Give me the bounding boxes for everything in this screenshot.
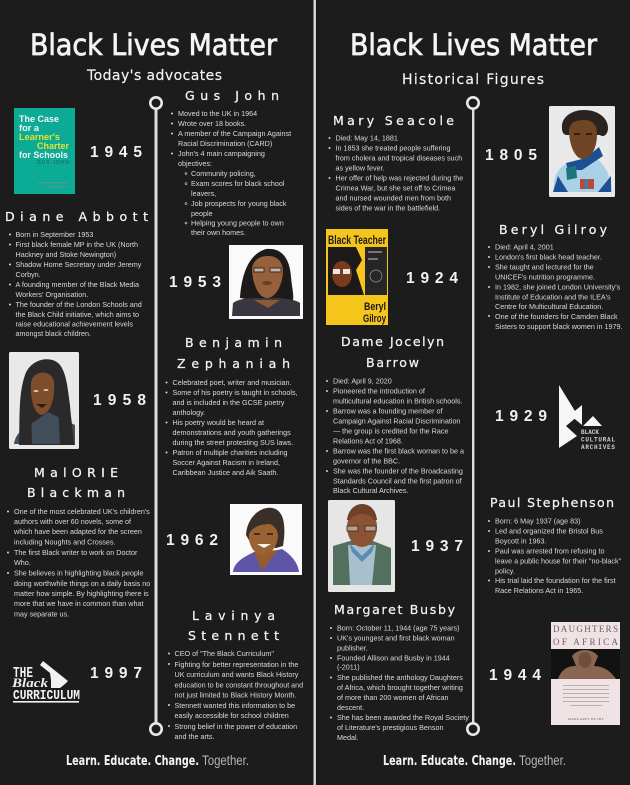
portrait: Paul Stephenson <box>328 500 395 592</box>
text block: Mary Seacole: sides of the war in the battlefield. <box>336 204 440 212</box>
text block: Gus John: objectives: <box>178 159 212 168</box>
text block: Margaret Busby: (-2011) <box>337 662 360 672</box>
book cover: The Case for a Learner's Charter for Schools: The Case <box>19 114 59 125</box>
text block: Mary Seacole: and nursed wounded men from both <box>336 194 451 202</box>
footer: right: Learn. Educate. Change. <box>383 754 516 769</box>
timeline: left <box>150 97 162 735</box>
text block: Benjamin Zephaniah: and is included in the GCSE poetry <box>172 398 285 407</box>
text block: Margaret Busby: of Africa, which brought together writing <box>337 683 463 692</box>
text block: Dame Jocelyn Barrow: Pioneered the introduction of <box>333 386 425 396</box>
text block: Malorie Blackman: more that we have in common than what <box>14 599 143 608</box>
text block: Malorie Blackman: Who. <box>14 558 31 567</box>
text block: Dame Jocelyn Barrow: multicultural education in British schools. <box>333 396 462 406</box>
footer: left: Together. <box>202 752 249 768</box>
text block: Dame Jocelyn Barrow <box>326 376 464 495</box>
text block: Lavinya Stennett: education to be constant throughout and <box>174 680 303 690</box>
text block: Diane Abbott: the Black Child initiative, which aims to <box>16 310 139 319</box>
text block: Margaret Busby: Born: October 11, 1944 (age 75 years) <box>337 624 460 632</box>
text block: Lavinya Stennett: not just limited to Black History Month. <box>174 690 296 700</box>
text block: Paul Stephenson: Boycott in 1963. <box>495 536 547 546</box>
text block: Margaret Busby <box>330 624 469 742</box>
heading: Diane Abbott: Diane Abbott <box>5 209 148 224</box>
text block: Beryl Gilroy: She taught and lectured for the <box>495 262 594 272</box>
text block: Malorie Blackman: doing worthwhile things on a daily basis no <box>14 579 150 588</box>
text block: Beryl Gilroy: Centre for Multicultural Education. <box>495 302 603 311</box>
heading: Benjamin Zephaniah <box>177 335 290 371</box>
text block: Gus John: leavers, <box>191 189 216 198</box>
book cover: Black Teacher: Black Teacher <box>328 233 386 247</box>
text block: Malorie Blackman: One of the most celebrated UK's children's <box>14 507 150 516</box>
text block: Dame Jocelyn Barrow: Black Cultural Archives. <box>333 486 408 495</box>
title: left: Black Lives Matter <box>30 28 277 62</box>
text block: Diane Abbott: First black female MP in the UK (North <box>16 240 138 249</box>
text block: Lavinya Stennett: UK curriculum and wants Black History <box>174 670 299 679</box>
text block: Dame Jocelyn Barrow: Barrow was the first black woman to be a <box>333 446 464 456</box>
book cover: The Case for a Learner's Charter for Schools: Learner's <box>19 132 60 143</box>
book cover: Black Teacher <box>326 229 388 325</box>
footer: left: Learn. Educate. Change. <box>66 754 199 769</box>
year: 1929: 1929 <box>495 408 547 425</box>
text block: Malorie Blackman: including Noughts and Crosses. <box>14 538 115 546</box>
text block: Benjamin Zephaniah: Patron of multiple charities including <box>172 448 288 457</box>
text block: Paul Stephenson: Paul was arrested from refusing to <box>495 546 604 556</box>
text block: Mary Seacole: In 1853 she treated people suffering <box>336 144 450 152</box>
text block: Diane Abbott: Hackney and Stoke Newington) <box>16 250 116 259</box>
text block: Malorie Blackman: The first Black writer to work on Doctor <box>14 548 138 557</box>
text block: Beryl Gilroy: Died: April 4, 2001 <box>495 242 554 252</box>
text block: Margaret Busby: of more than 200 women of African <box>337 693 448 702</box>
text block: Beryl Gilroy <box>488 242 622 331</box>
year: 1805: 1805 <box>485 147 537 164</box>
portrait: Mary Seacole <box>549 106 615 197</box>
heading: Dame Jocelyn Barrow <box>341 334 444 370</box>
text block: Margaret Busby: UK's youngest and first black woman <box>337 634 455 642</box>
portrait: Benjamin Zephaniah <box>9 352 79 449</box>
text block: Benjamin Zephaniah: Caribbean Justice and Aik Saath. <box>172 468 278 477</box>
text block: Lavinya Stennett: easily accessible for school children <box>174 711 289 720</box>
text block: Dame Jocelyn Barrow: She was the founder of the Broadcasting <box>333 466 463 476</box>
heading: Lavinya Stennett <box>188 608 279 643</box>
text block: Dame Jocelyn Barrow: Died: April 9, 2020 <box>333 376 392 386</box>
text block: Gus John: Helping young people to own <box>191 218 284 228</box>
text block: Mary Seacole <box>328 134 463 212</box>
logo: Black Cultural Archives: CULTURAL <box>581 436 615 444</box>
text block: Gus John: their own homes. <box>191 228 246 237</box>
text block: Margaret Busby: She published the anthology Daughters <box>337 673 463 682</box>
heading: Lavinya Stennett: Stennett <box>188 628 279 643</box>
year: 1937: 1937 <box>411 538 463 555</box>
text block: Diane Abbott: Workers' Organisation. <box>16 290 88 299</box>
logo: The Black Curriculum: CURRICULUM <box>13 688 80 704</box>
text block: Malorie Blackman: may separate us. <box>14 610 69 618</box>
year: 1953: 1953 <box>169 274 221 291</box>
title: right: Black Lives Matter <box>350 28 597 62</box>
heading: Malorie Blackman <box>27 465 125 500</box>
year: 1997: 1997 <box>90 665 142 682</box>
book cover: Black Teacher: Gilroy <box>363 313 387 325</box>
text block: Benjamin Zephaniah: Soccer Against Racism in Ireland, <box>172 458 280 467</box>
logo: The Black Curriculum <box>11 661 80 704</box>
text block: Benjamin Zephaniah <box>166 378 298 477</box>
book cover: Daughters of Africa <box>551 622 620 725</box>
text block: Mary Seacole: Crimea War, but she set off to Crimea <box>336 184 455 192</box>
text block: Margaret Busby: descent. <box>337 703 364 712</box>
subtitle: today's advocates: Today's advocates <box>86 68 222 84</box>
text block: Benjamin Zephaniah: anthology. <box>172 408 205 417</box>
text block: Malorie Blackman: authors with over 60 novels, some of <box>14 517 131 526</box>
logo: Black Cultural Archives <box>559 385 615 451</box>
text block: Diane Abbott: The founder of the London Schools and <box>16 300 142 309</box>
logo: The Black Curriculum: THE <box>13 665 33 682</box>
text block: Benjamin Zephaniah: demonstrations and youth gatherings <box>172 428 291 437</box>
text block: Gus John: A member of the Campaign Against <box>178 129 291 138</box>
year: 1958: 1958 <box>93 392 146 409</box>
subtitle: historical figures: Historical Figures <box>402 72 544 88</box>
year: 1944: 1944 <box>489 667 541 684</box>
text block: Paul Stephenson: policy. <box>495 566 515 576</box>
text block: Beryl Gilroy: One of the founders for Camden Black <box>495 312 618 321</box>
text block: Lavinya Stennett <box>168 649 303 741</box>
text block: Margaret Busby: Medal. <box>337 733 359 742</box>
text block: Gus John: Exam scores for black school <box>191 179 285 188</box>
heading: Benjamin Zephaniah: Zephaniah <box>177 356 290 371</box>
text block: Benjamin Zephaniah: Celebrated poet, writer and musician. <box>172 378 292 387</box>
heading: Paul Stephenson: Paul Stephenson <box>490 495 614 510</box>
text block: Diane Abbott: Born in September 1953 <box>16 230 93 239</box>
book cover: Daughters of Africa: DAUGHTERS <box>553 624 618 634</box>
text block: Dame Jocelyn Barrow: Standards Council and the first patron of <box>333 476 462 486</box>
book cover: The Case for a Learner's Charter for Schools: for Schools <box>19 150 68 161</box>
logo: Black Cultural Archives: BLACK <box>581 429 599 436</box>
text block: Margaret Busby: publisher. <box>337 644 368 652</box>
text block: Malorie Blackman <box>7 507 150 618</box>
heading: Dame Jocelyn Barrow: Dame Jocelyn <box>341 334 444 349</box>
text block: Gus John: Community policing, <box>191 169 256 178</box>
heading: Margaret Busby: Margaret Busby <box>334 602 456 617</box>
text block: Margaret Busby: of Literature's prestigious Benson <box>337 723 443 732</box>
text block: Paul Stephenson: Led and organized the Bristol Bus <box>495 526 603 536</box>
text block: Paul Stephenson: His trial laid the foundation for the first <box>495 576 616 585</box>
heading: Gus John: Gus John <box>185 88 279 103</box>
timeline: right <box>467 97 479 735</box>
text block: Mary Seacole: from cholera and tropical diseases such <box>336 154 462 162</box>
text block: Gus John: Job prospects for young black <box>191 199 287 208</box>
text block: Lavinya Stennett: Fighting for better representation in the <box>174 660 298 669</box>
heading: Beryl Gilroy: Beryl Gilroy <box>499 222 608 237</box>
text block: Malorie Blackman: which have been adapted for the screen <box>13 527 142 536</box>
book cover: Black Teacher: Beryl <box>364 301 386 313</box>
left panel: today's advocates <box>5 28 303 769</box>
text block: Gus John: Moved to the UK in 1964 <box>178 109 257 118</box>
text block: Paul Stephenson: leave a public house for their "no-black" <box>495 556 622 566</box>
heading: Dame Jocelyn Barrow: Barrow <box>366 355 419 370</box>
text block: Lavinya Stennett: Stennett wanted this information to be <box>174 701 295 710</box>
text block: Paul Stephenson: Born: 6 May 1937 (age 83) <box>495 516 581 526</box>
text block: Dame Jocelyn Barrow: Campaign Against Racial Discrimination <box>333 416 460 426</box>
right panel: historical figures <box>326 28 622 769</box>
book cover: The Case for a Learner's Charter for Schools: Charter <box>37 141 69 152</box>
text block: Benjamin Zephaniah: during the street protesting SUS laws. <box>172 438 293 447</box>
text block: Margaret Busby: She has been awarded the Royal Society <box>337 713 469 722</box>
text block: Diane Abbott <box>9 230 142 338</box>
heading: Lavinya Stennett: Lavinya <box>192 608 275 623</box>
heading: Malorie Blackman: MalORIE <box>34 465 118 480</box>
text block: Lavinya Stennett: and the arts. <box>174 732 214 741</box>
text block: Benjamin Zephaniah: His poetry would be heard at <box>172 418 264 427</box>
text block: Beryl Gilroy: Institute of Education and the ILEA's <box>495 292 611 302</box>
text block: Dame Jocelyn Barrow: — the group is credited for the Race <box>333 426 448 436</box>
text block: Dame Jocelyn Barrow: Barrow was a founding member of <box>333 406 442 416</box>
heading: Mary Seacole: Mary Seacole <box>333 113 454 128</box>
text block: Malorie Blackman: matter how simple. By highlighting there is <box>14 589 149 598</box>
year: 1924: 1924 <box>406 270 458 287</box>
portrait: Malorie Blackman <box>230 504 302 575</box>
book cover: Daughters of Africa: MARGARET BUSBY <box>568 717 604 721</box>
text block: Margaret Busby: Founded Allison and Busby in 1944 <box>337 654 450 662</box>
text block: Diane Abbott: amongst black children. <box>16 329 91 338</box>
text block: Diane Abbott: Shadow Home Secretary under Jeremy <box>16 260 142 269</box>
text block: Lavinya Stennett: CEO of "The Black Curriculum" <box>174 649 274 658</box>
text block: Gus John: John's 4 main campaigning <box>178 149 265 158</box>
book cover: The Case for a Learner's Charter for Schools: GUS JOHN <box>37 160 69 166</box>
text block: Beryl Gilroy: In 1982, she joined London University's <box>495 282 621 292</box>
text block: Gus John: people <box>191 209 213 218</box>
text block: Malorie Blackman: She believes in highlighting black people <box>14 568 143 578</box>
book cover: The Case for a Learner's Charter for Schools: for a <box>19 123 40 134</box>
heading: Benjamin Zephaniah: Benjamin <box>185 335 282 350</box>
year: 1945: 1945 <box>90 144 142 161</box>
text block: Diane Abbott: Corbyn. <box>16 270 41 279</box>
text block: Paul Stephenson <box>488 516 622 595</box>
text block: Benjamin Zephaniah: Some of his poetry is taught in schools, <box>172 388 298 397</box>
portrait: Diane Abbott <box>229 245 303 319</box>
text block: Dame Jocelyn Barrow: Relations Act of 1968. <box>333 436 403 446</box>
logo: The Black Curriculum: Black <box>11 675 49 690</box>
text block: Lavinya Stennett: Strong belief in the power of education <box>174 722 297 731</box>
logo: Black Cultural Archives: ARCHIVES <box>581 444 615 451</box>
text block: Beryl Gilroy: Sisters to support black women in 1979. <box>495 322 622 331</box>
text block: Diane Abbott: A founding member of the Black Media <box>16 280 139 289</box>
text block: Mary Seacole: Her offer of help was rejected during the <box>336 174 463 182</box>
heading: Malorie Blackman: Blackman <box>27 485 125 500</box>
text block: Dame Jocelyn Barrow: governor of the BBC. <box>333 456 400 466</box>
text block: Gus John: Wrote over 18 books. <box>178 119 246 128</box>
text block: Beryl Gilroy: London's first black head teacher. <box>495 252 602 262</box>
text block: Diane Abbott: raise educational achievement levels <box>16 320 133 328</box>
text block: Paul Stephenson: Race Relations Act in 1965. <box>495 586 583 595</box>
book cover: Daughters of Africa: OF AFRICA <box>553 637 618 647</box>
year: 1962: 1962 <box>166 532 218 549</box>
text block: Mary Seacole: as yellow fever. <box>336 164 385 172</box>
text block: Gus John: Racial Discrimination (CARD) <box>178 139 272 148</box>
book cover: The Case for a Learner's Charter for Schools <box>14 108 75 194</box>
footer: right: Together. <box>519 752 566 768</box>
text block: Beryl Gilroy: UNICEF's nutrition programme. <box>495 272 595 282</box>
text block: Gus John <box>171 109 291 237</box>
text block: Mary Seacole: Died: May 14, 1881 <box>336 134 398 142</box>
